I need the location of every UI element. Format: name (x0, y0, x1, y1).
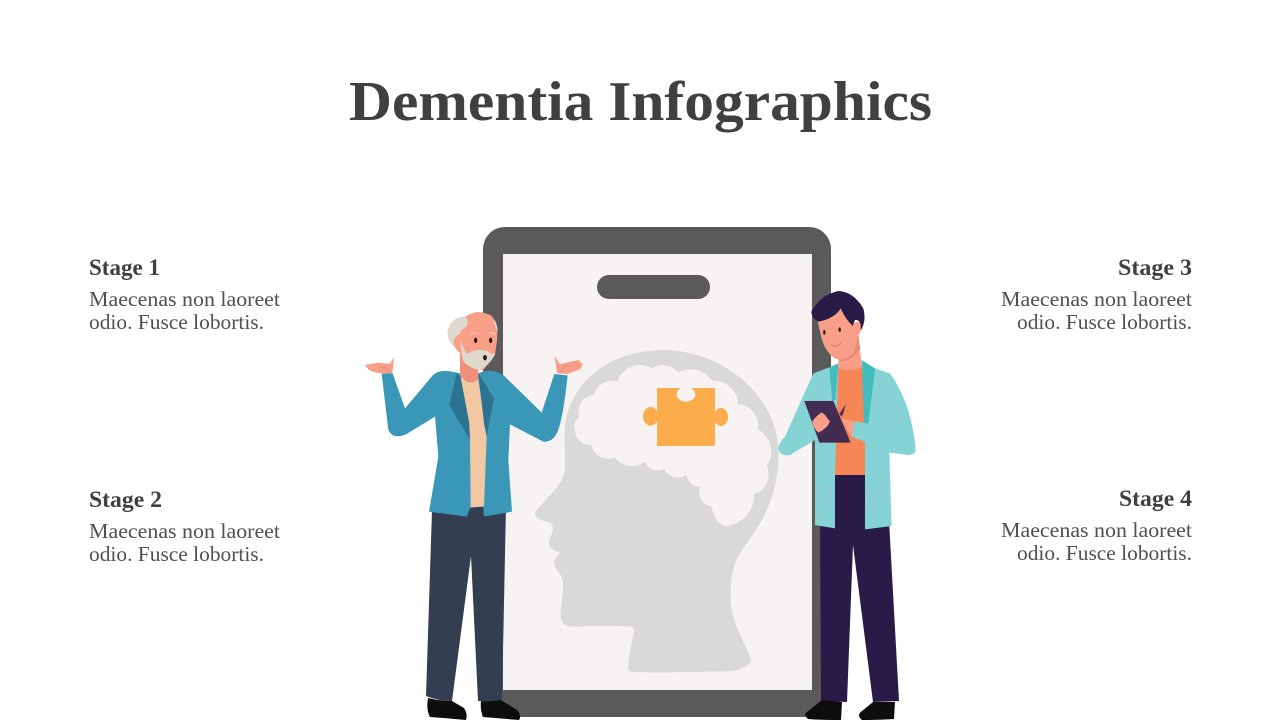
hands (812, 412, 830, 433)
neck (460, 350, 478, 382)
figure: doctor with clipboard (778, 291, 916, 720)
hair (447, 317, 468, 346)
shirt (460, 377, 487, 507)
text block: stage 4: Stage 4 (1119, 486, 1193, 511)
head silhouette (535, 350, 779, 672)
hands (365, 357, 394, 373)
text block: stage 1 (89, 255, 280, 334)
text block: stage 2: odio. Fusce lobortis. (89, 542, 264, 566)
beard (460, 340, 495, 370)
text block: stage 1: Stage 1 (89, 255, 160, 280)
shirt (835, 365, 865, 475)
face details (823, 327, 841, 335)
pen (839, 404, 846, 417)
lapels (449, 373, 470, 440)
figure: elderly patient (365, 312, 583, 720)
text block: stage 3: Maecenas non laoreet (1001, 287, 1192, 311)
text block: stage 3 (1001, 255, 1192, 334)
shoes (805, 700, 895, 720)
jacket and arms (382, 371, 568, 517)
head (453, 312, 497, 370)
coat lines and pockets (818, 377, 888, 508)
neck (838, 335, 862, 370)
collar (829, 363, 838, 402)
text block: stage 3: Stage 3 (1118, 255, 1192, 280)
sleeve (852, 413, 889, 452)
face details (474, 338, 492, 360)
head (818, 308, 863, 359)
icon: head with brain and puzzle piece (535, 350, 779, 672)
text block: stage 2: Stage 2 (89, 487, 162, 512)
text block: stage 2: Maecenas non laoreet (89, 519, 280, 543)
puzzle piece (643, 387, 728, 446)
text block: stage 4 (1001, 486, 1193, 565)
clipboard (804, 401, 851, 443)
trousers (426, 505, 506, 701)
text block: stage 4: Maecenas non laoreet (1001, 518, 1192, 542)
text block: stage 1: odio. Fusce lobortis. (89, 310, 264, 334)
shoes (427, 698, 520, 720)
trousers (820, 475, 899, 702)
text block: stage 1: Maecenas non laoreet (89, 287, 280, 311)
text block: stage 2 (89, 487, 280, 566)
phone device (483, 227, 831, 717)
brain (574, 365, 771, 526)
coat (778, 367, 916, 529)
hair (811, 291, 865, 330)
text block: stage 3: odio. Fusce lobortis. (1017, 310, 1192, 334)
text block: stage 4: odio. Fusce lobortis. (1017, 541, 1192, 565)
title: Dementia Infographics (349, 71, 932, 133)
